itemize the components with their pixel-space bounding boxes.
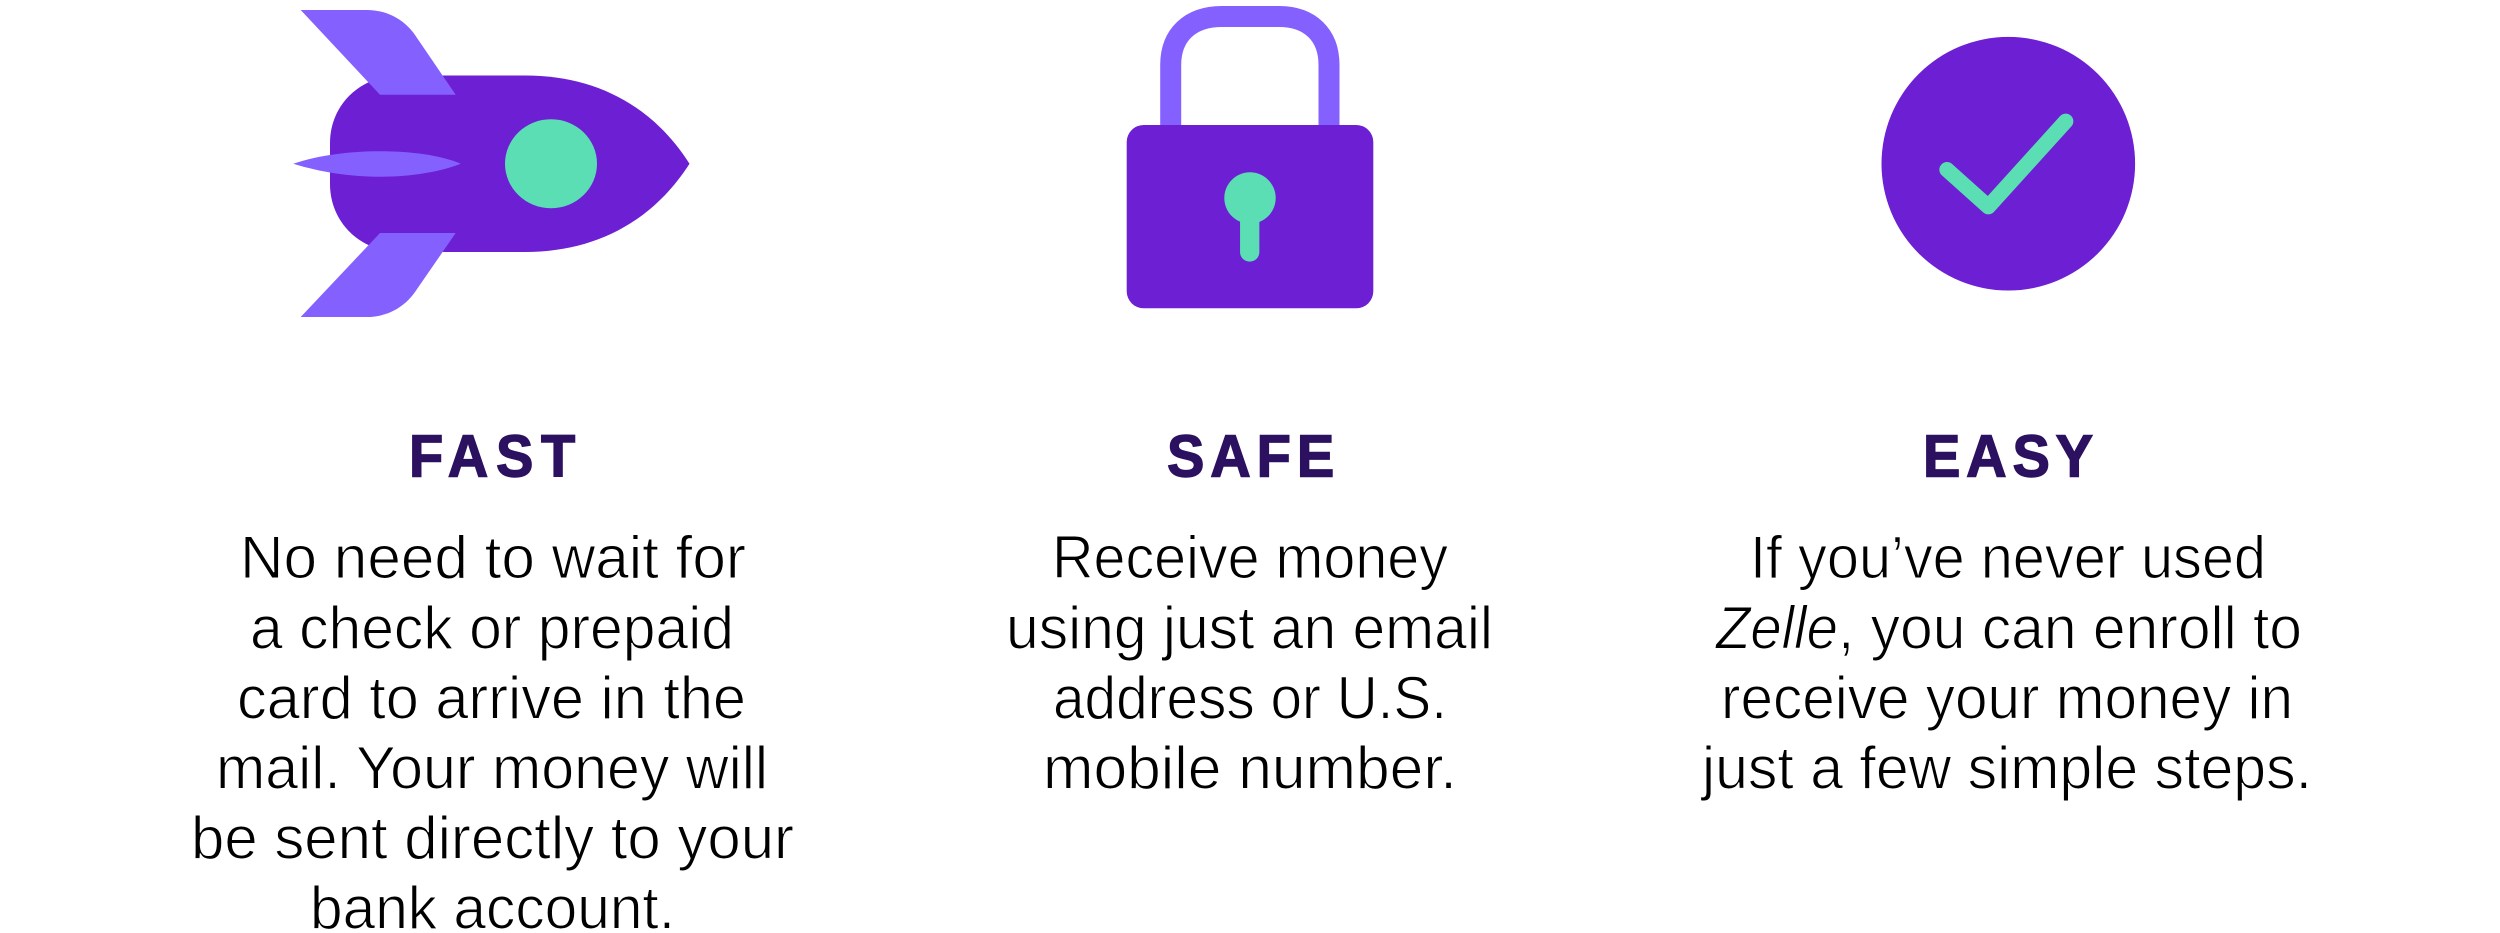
text block: easy description: If you’ve never used	[1750, 524, 2266, 591]
text block: safe description: mobile number.	[1043, 734, 1457, 801]
icon: check circle	[1882, 37, 2135, 290]
heading: SAFE: SAFE	[1167, 424, 1334, 490]
icon: rocket	[293, 10, 690, 317]
text block: easy description: receive your money in	[1721, 664, 2293, 731]
icon: padlock	[1127, 16, 1373, 308]
text block: fast description: card to arrive in the	[237, 664, 746, 731]
text block: safe description: using just an email	[1006, 594, 1493, 661]
text block: safe description: Receive money	[1052, 524, 1448, 591]
heading: EASY: EASY	[1923, 424, 2093, 490]
text block: fast description: mail. Your money will	[216, 734, 768, 801]
text block: fast description: be sent directly to your	[191, 804, 794, 871]
text block: fast description: No need to wait for	[240, 524, 746, 591]
text block: fast description	[191, 524, 794, 933]
text block: safe description	[1006, 524, 1493, 801]
text block: easy description: just a few simple steps.	[1700, 734, 2312, 801]
text block: fast description: a check or prepaid	[250, 594, 734, 661]
text block: easy description: Zelle	[1714, 594, 1838, 661]
text block: easy description	[1700, 524, 2312, 801]
text block: easy description: , you can enroll to	[1838, 594, 2302, 661]
heading: FAST: FAST	[409, 424, 575, 490]
text block: safe description: address or U.S.	[1053, 664, 1447, 731]
